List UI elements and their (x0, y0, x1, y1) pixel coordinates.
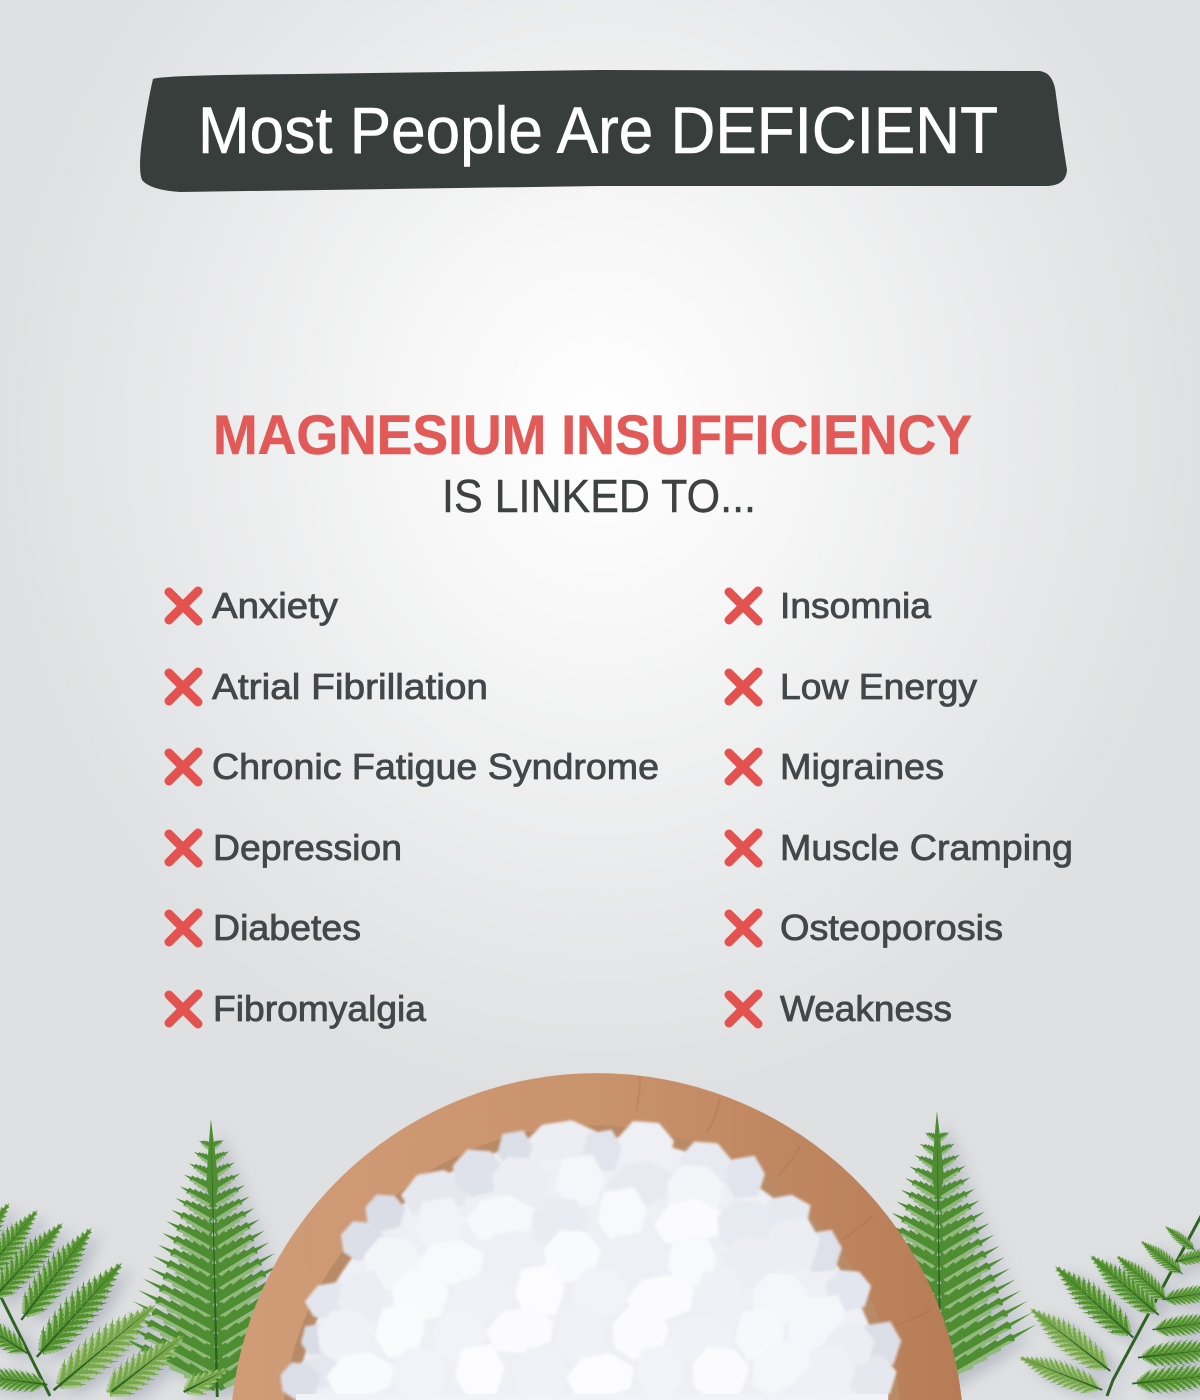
ferns: left cluster (0, 1117, 318, 1400)
title: Most People Are DEFICIENT (198, 93, 998, 167)
subheading: IS LINKED TO... (442, 470, 756, 522)
title banner (140, 70, 1067, 192)
item: Atrial Fibrillation: Atrial Fibrillation (212, 666, 488, 707)
item: Low Energy: Low Energy (780, 666, 977, 707)
panel: right symptom list (729, 585, 1073, 1029)
item: Insomnia: Insomnia (780, 585, 932, 626)
item: Migraines: Migraines (780, 746, 944, 787)
item: Anxiety: Anxiety (212, 585, 338, 626)
heading: magnesium insufficiency: MAGNESIUM INSUFFICIENCY (213, 403, 972, 466)
item: Weakness: Weakness (780, 988, 952, 1029)
item: Muscle Cramping: Muscle Cramping (780, 827, 1073, 868)
banner: dark brush stroke (140, 70, 1067, 192)
salt crystals (280, 1120, 901, 1400)
item: Fibromyalgia: Fibromyalgia (213, 988, 427, 1029)
item: Diabetes: Diabetes (213, 907, 361, 948)
item: Chronic Fatigue Syndrome: Chronic Fatigue Syndrome (212, 746, 659, 787)
ferns: right cluster (836, 1110, 1200, 1400)
bowl of magnesium salt crystals (232, 1073, 962, 1400)
item: Osteoporosis: Osteoporosis (780, 907, 1003, 948)
wooden bowl rim (232, 1073, 962, 1400)
item: Anxiety (169, 585, 338, 626)
panel: left symptom list (169, 585, 659, 1029)
item: Depression: Depression (213, 827, 402, 868)
